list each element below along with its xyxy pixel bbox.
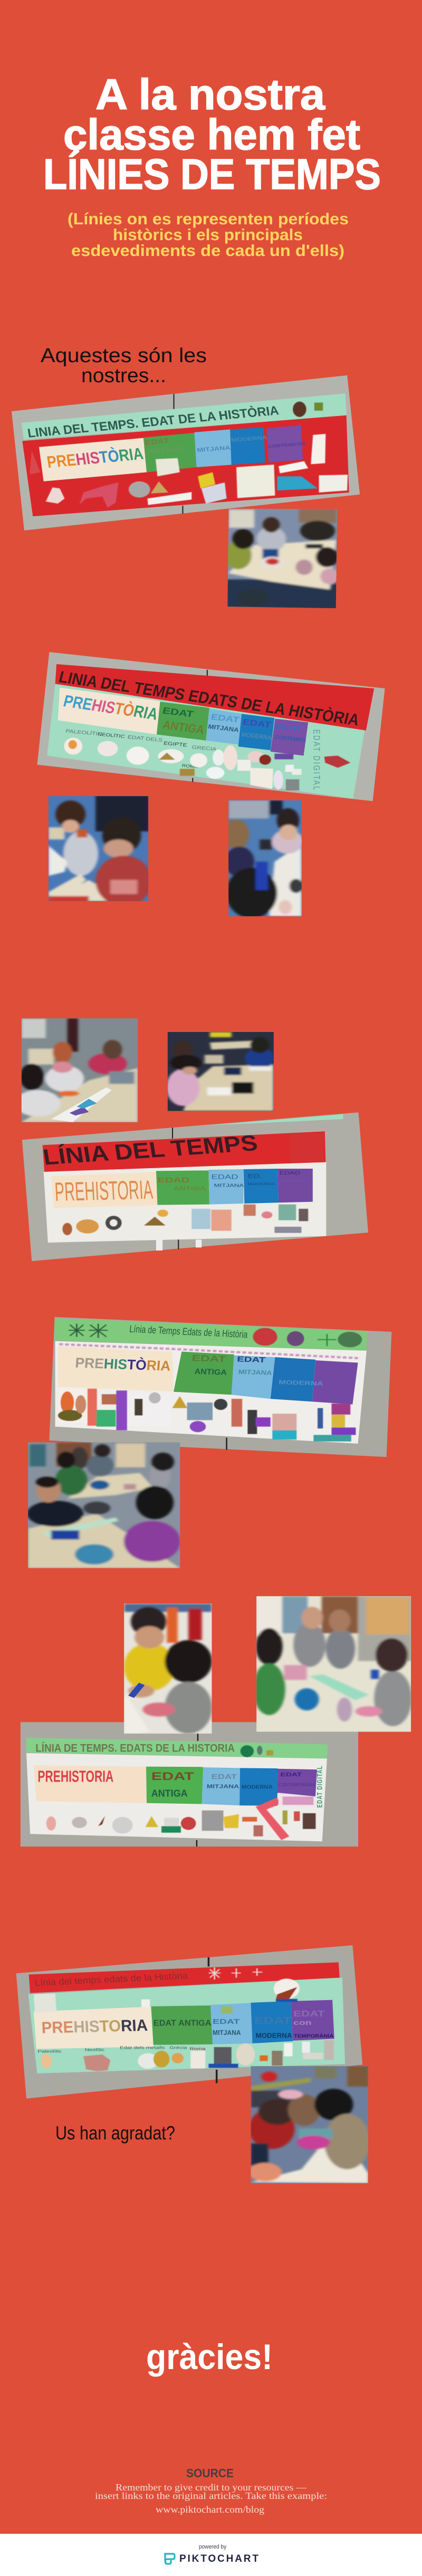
poster 6 period labels: MODERNA [256,2031,292,2040]
poster 2 period labels: EDAT [275,722,302,733]
photo 2a: two boys [49,796,149,902]
poster 2 small labels [65,728,321,790]
poster 3 period labels: EDAD [280,1170,301,1176]
poster 6 drawings [34,1967,334,2071]
poster 2 period labels: MITJANA [207,723,239,733]
poster 5: green heading and white timeline: PREHISTORIA [37,1767,113,1786]
poster 4 period labels: ANTIGA [194,1367,227,1377]
poster 4 drawings [56,1324,362,1442]
photo 2b: girls at table [228,800,302,916]
poster 2 drawings [64,737,350,790]
poster 6 heading: Línia del temps edats de la Història [34,1970,189,1988]
poster 4 period labels: EDAT [237,1355,266,1364]
subtitle [68,210,349,260]
poster 3 drawings [62,1133,324,1235]
poster 6 period labels: EDAT [254,2015,291,2026]
source block [95,2466,327,2515]
poster 6 period labels: MITJANA [213,2029,241,2037]
poster 1 drawings [30,402,348,508]
poster 2 period labels: EDAT [242,717,272,730]
poster 2: red heading and mint timeline [37,652,385,801]
poster 5 period labels: EDAT [212,1774,237,1781]
poster 2 small labels: ROMA [181,763,198,769]
poster 6 period labels: EDAT [293,2010,325,2019]
poster 6 period labels: EDAT [213,2018,239,2025]
poster 1 period labels: MODERNA [231,434,268,443]
intro text: Aquestes són les [41,345,207,367]
poster 1 period labels: EDAT [145,437,170,447]
poster 1 heading: LINIA DEL TEMPS. EDAT DE LA HISTÒRIA [26,403,280,440]
photo 3b: children writing [166,1031,274,1112]
poster 4 period labels [191,1353,323,1387]
poster 6 small labels: Neolític [85,2048,104,2052]
source block: www.piktochart.com/blog [156,2504,264,2515]
icon: piktochart mark [165,2554,175,2564]
poster 3 period labels: ED. [247,1173,262,1179]
poster 5: green heading and white timeline [21,1722,358,1846]
title: classe hem fet [63,111,360,159]
poster 2 small labels: EGIPTE [163,741,187,748]
poster 2 small labels: NEOLÍTIC [97,732,125,740]
title: A la nostra [95,71,325,119]
poster 6 period labels [154,2010,334,2040]
poster 6 period labels: EDAT ANTIGA [154,2019,212,2028]
photo 5a: boy in yellow gluing [122,1602,214,1735]
poster 4 period labels: EDAT [191,1353,226,1364]
poster 6 small labels: Roma [190,2047,206,2051]
poster 5 period labels: EDAT [281,1771,302,1777]
poster 5 heading: LÍNIA DE TEMPS. EDATS DE LA HISTORIA [35,1741,235,1754]
photo 1: children at table [225,507,339,610]
subtitle: esdevediments de cada un d'ells) [71,241,344,260]
poster 3: red heading and white timeline: PREHISTORIA [54,1175,154,1207]
poster 3 period labels: MODERNA [247,1182,275,1186]
poster 4: green heading and decorated timeline [49,1317,391,1457]
thanks heading: gràcies! [146,2337,273,2377]
poster 1 period labels: CONTEMPOR. [267,441,308,449]
poster 2 period labels: EDAT [210,712,240,724]
title [43,71,381,198]
photo 5b: four children around table [253,1595,412,1732]
poster 2 period labels [161,706,306,743]
poster 2 period labels: EDAT [161,706,195,719]
poster 2 small labels: PALEOLÍTIC [65,728,103,737]
poster 5 period labels: EDAT [151,1770,194,1783]
subtitle: (Línies on es representen períodes [68,210,349,228]
source block: insert links to the original articles. Take this example: [95,2490,327,2501]
poster 3 period labels: contemporània [280,1179,309,1182]
poster 1 period labels: ANTIGA [147,445,183,456]
footer band [0,2534,422,2576]
poster 5 period labels [151,1770,315,1798]
poster 3: red heading and white timeline [22,1112,368,1261]
intro text [41,345,207,387]
poster 1 period labels: MITJANA [197,444,231,453]
title: LÍNIES DE TEMPS [43,150,381,198]
footer logo [165,2544,258,2564]
poster 2 period labels: CONTEMPO [274,734,306,743]
poster 1 prehistory label: PREHISTÒRIA [45,444,145,471]
poster 2 small labels: EDAT DELS [127,734,163,743]
poster 6 small labels [37,2045,206,2054]
poster 6 small labels: Paleolític [37,2049,62,2054]
poster 5 period labels: MITJANA [207,1783,239,1789]
closing question: Us han agradat? [55,2122,175,2144]
source block: SOURCE [186,2466,234,2480]
poster 3 period labels: ANTIGA [174,1186,206,1191]
poster 5 drawings [46,1745,315,1840]
poster 4 period labels: MITJANA [238,1369,272,1377]
photo 6: children huddled over table [248,2064,370,2184]
poster 3 period labels: EDAD [157,1176,189,1184]
poster 6 small labels: Grècia [169,2045,187,2050]
subtitle: històrics i els principals [113,225,303,244]
source block: Remember to give credit to your resources — [116,2482,307,2493]
poster 5 digital age label: EDAT DIGITAL [315,1766,324,1807]
poster 1: red and mint timeline [12,375,360,531]
poster 2 small labels: GRECIA [191,745,217,752]
poster 3 period labels [157,1170,309,1191]
poster 5 period labels: ANTIGA [151,1788,188,1798]
poster 3 period labels: MITJANA [214,1183,244,1188]
poster 4 period labels: MODERNA [279,1378,323,1387]
poster 2 small labels: EDAT DIGITAL [311,730,321,790]
poster 3 period labels: EDAD [212,1173,238,1180]
poster 1 period labels [145,434,308,456]
poster 6: red heading and mint timeline [16,1945,362,2099]
photo 4: group at table [27,1442,181,1569]
poster 2 prehistory label: PREHISTÒRIA [62,691,160,723]
poster 6 small labels: Edat dels metalls [120,2045,165,2050]
poster 6 prehistory label: PREHISTORIA [41,2016,148,2037]
intro text: nostres... [81,365,166,387]
photo 3a: three girls with strip [15,1017,139,1123]
poster 6 period labels: TEMPORÀNIA [294,2033,334,2039]
poster 3 heading: LÍNIA DEL TEMPS [41,1131,260,1170]
poster 5 period labels: MODERNA [242,1784,273,1790]
footer logo: PIKTOCHART [179,2553,258,2564]
poster 6 period labels: con [293,2019,312,2026]
footer logo: powered by [199,2544,226,2550]
poster 5 period labels: CONTEMPORÀNIA [279,1782,315,1788]
poster 4 prehistory label: PREHISTÒRIA [74,1355,171,1374]
poster 2 period labels: ANTIGA [161,718,206,736]
poster 4 heading: Línia de Temps Edats de la Història [129,1324,248,1340]
poster 2 period labels: MODERNA [241,731,273,742]
